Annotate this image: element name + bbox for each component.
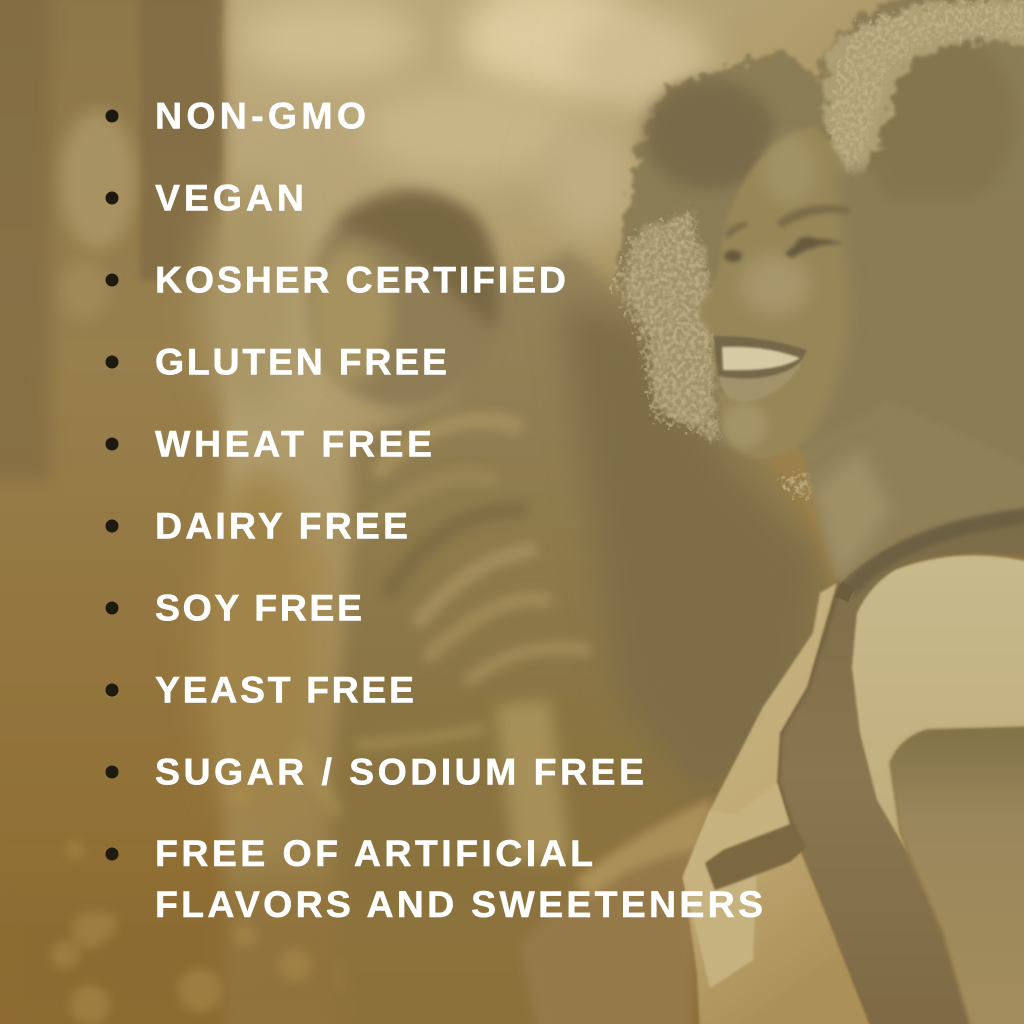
strap clip	[835, 582, 855, 602]
bright curly hair rim	[615, 0, 1024, 500]
face	[700, 127, 866, 458]
item: Wheat free: WHEAT FREE	[155, 422, 432, 464]
buckle strap	[705, 823, 807, 890]
item: Yeast free: YEAST FREE	[155, 668, 414, 710]
item: Vegan: VEGAN	[155, 176, 304, 218]
smile	[714, 336, 807, 396]
item: Free of artificial flavors and sweeteners: FREE OF ARTIFICIAL	[155, 832, 593, 874]
item: Gluten free: GLUTEN FREE	[155, 340, 447, 382]
arm	[890, 727, 1024, 1024]
item: Kosher certified: KOSHER CERTIFIED	[155, 258, 566, 300]
item: Sugar / sodium free: SUGAR / SODIUM FREE	[155, 750, 644, 792]
striped shirt bands	[300, 420, 585, 810]
photo: smiling woman in foreground	[615, 0, 1024, 1024]
backpack strap and panel	[777, 512, 1024, 1024]
shirt pocket flap	[683, 783, 790, 988]
item: Free of artificial flavors and sweeteners: FLAVORS AND SWEETENERS	[155, 883, 763, 925]
item: Free of artificial flavors and sweeteners	[106, 832, 763, 925]
eyes and brows	[724, 205, 850, 262]
hair base	[617, 0, 1024, 520]
raised hand and forearm	[520, 798, 712, 1024]
item: Non-GMO: NON-GMO	[155, 94, 366, 136]
item: Soy free: SOY FREE	[155, 586, 362, 628]
item: Dairy free: DAIRY FREE	[155, 504, 408, 546]
face right shadow blending into hair	[800, 170, 885, 450]
bullet list	[106, 94, 763, 925]
photo: background person, blurred	[300, 190, 835, 1024]
shirt front	[683, 583, 873, 1024]
neck	[800, 400, 1024, 590]
face highlight	[741, 255, 809, 315]
sleeve	[852, 555, 1024, 853]
bokeh	[51, 554, 442, 1024]
